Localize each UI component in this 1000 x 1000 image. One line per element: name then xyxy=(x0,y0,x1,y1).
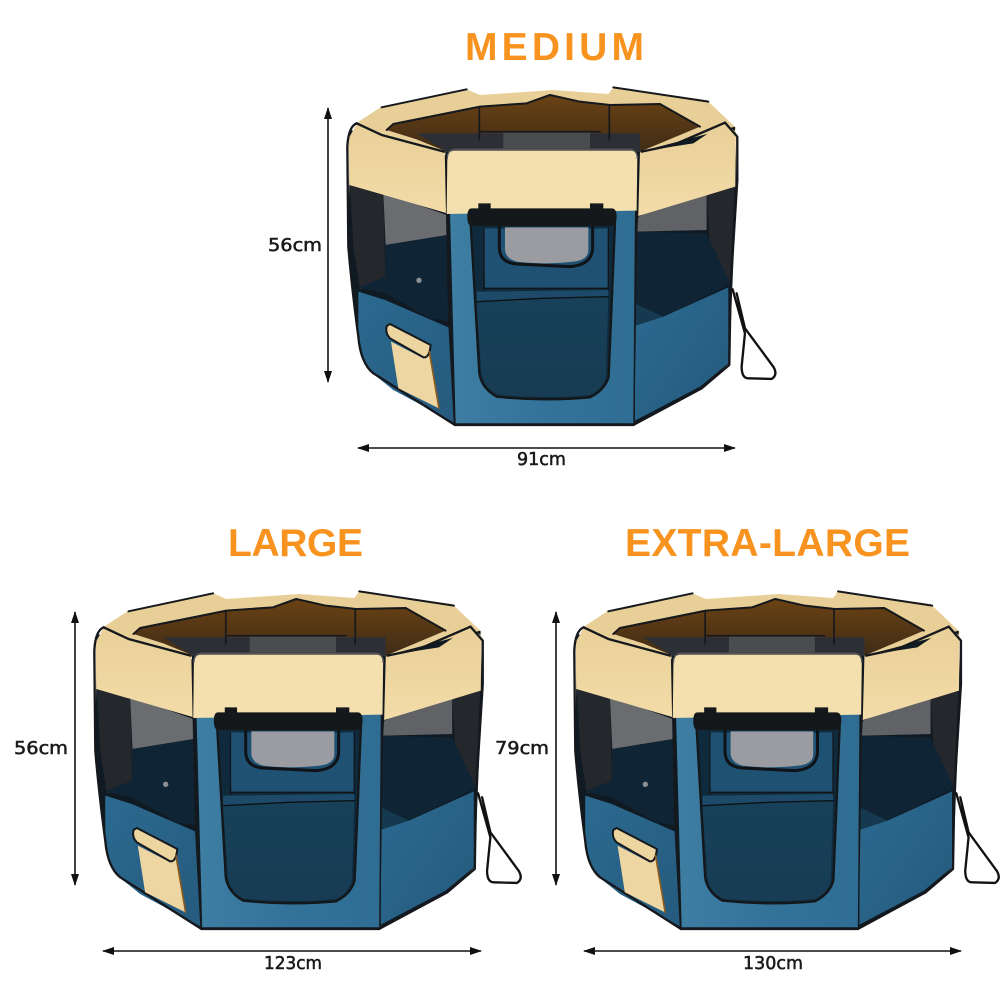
heading: MEDIUM: MEDIUM xyxy=(465,26,644,69)
panel: large size xyxy=(14,522,521,974)
illustration: extra-large playpen xyxy=(574,591,999,929)
arrow: large height xyxy=(74,612,76,885)
illustration: medium playpen xyxy=(347,87,775,425)
heading: LARGE: LARGE xyxy=(228,522,363,565)
arrow: large width xyxy=(103,950,481,952)
arrow: extra-large height xyxy=(555,612,557,885)
label: extra-large height: 79cm xyxy=(495,738,549,759)
label: medium width: 91cm xyxy=(517,449,566,470)
arrow: medium height xyxy=(327,108,329,382)
label: extra-large width: 130cm xyxy=(743,953,803,974)
label: large width: 123cm xyxy=(264,953,322,974)
heading: EXTRA-LARGE: EXTRA-LARGE xyxy=(625,522,910,565)
arrow: medium width xyxy=(358,447,735,449)
illustration: large playpen xyxy=(94,591,521,929)
arrow: extra-large width xyxy=(584,950,961,952)
panel: extra-large size xyxy=(495,522,999,974)
panel: medium size xyxy=(268,26,775,470)
label: large height: 56cm xyxy=(14,738,68,759)
label: medium height: 56cm xyxy=(268,235,322,256)
